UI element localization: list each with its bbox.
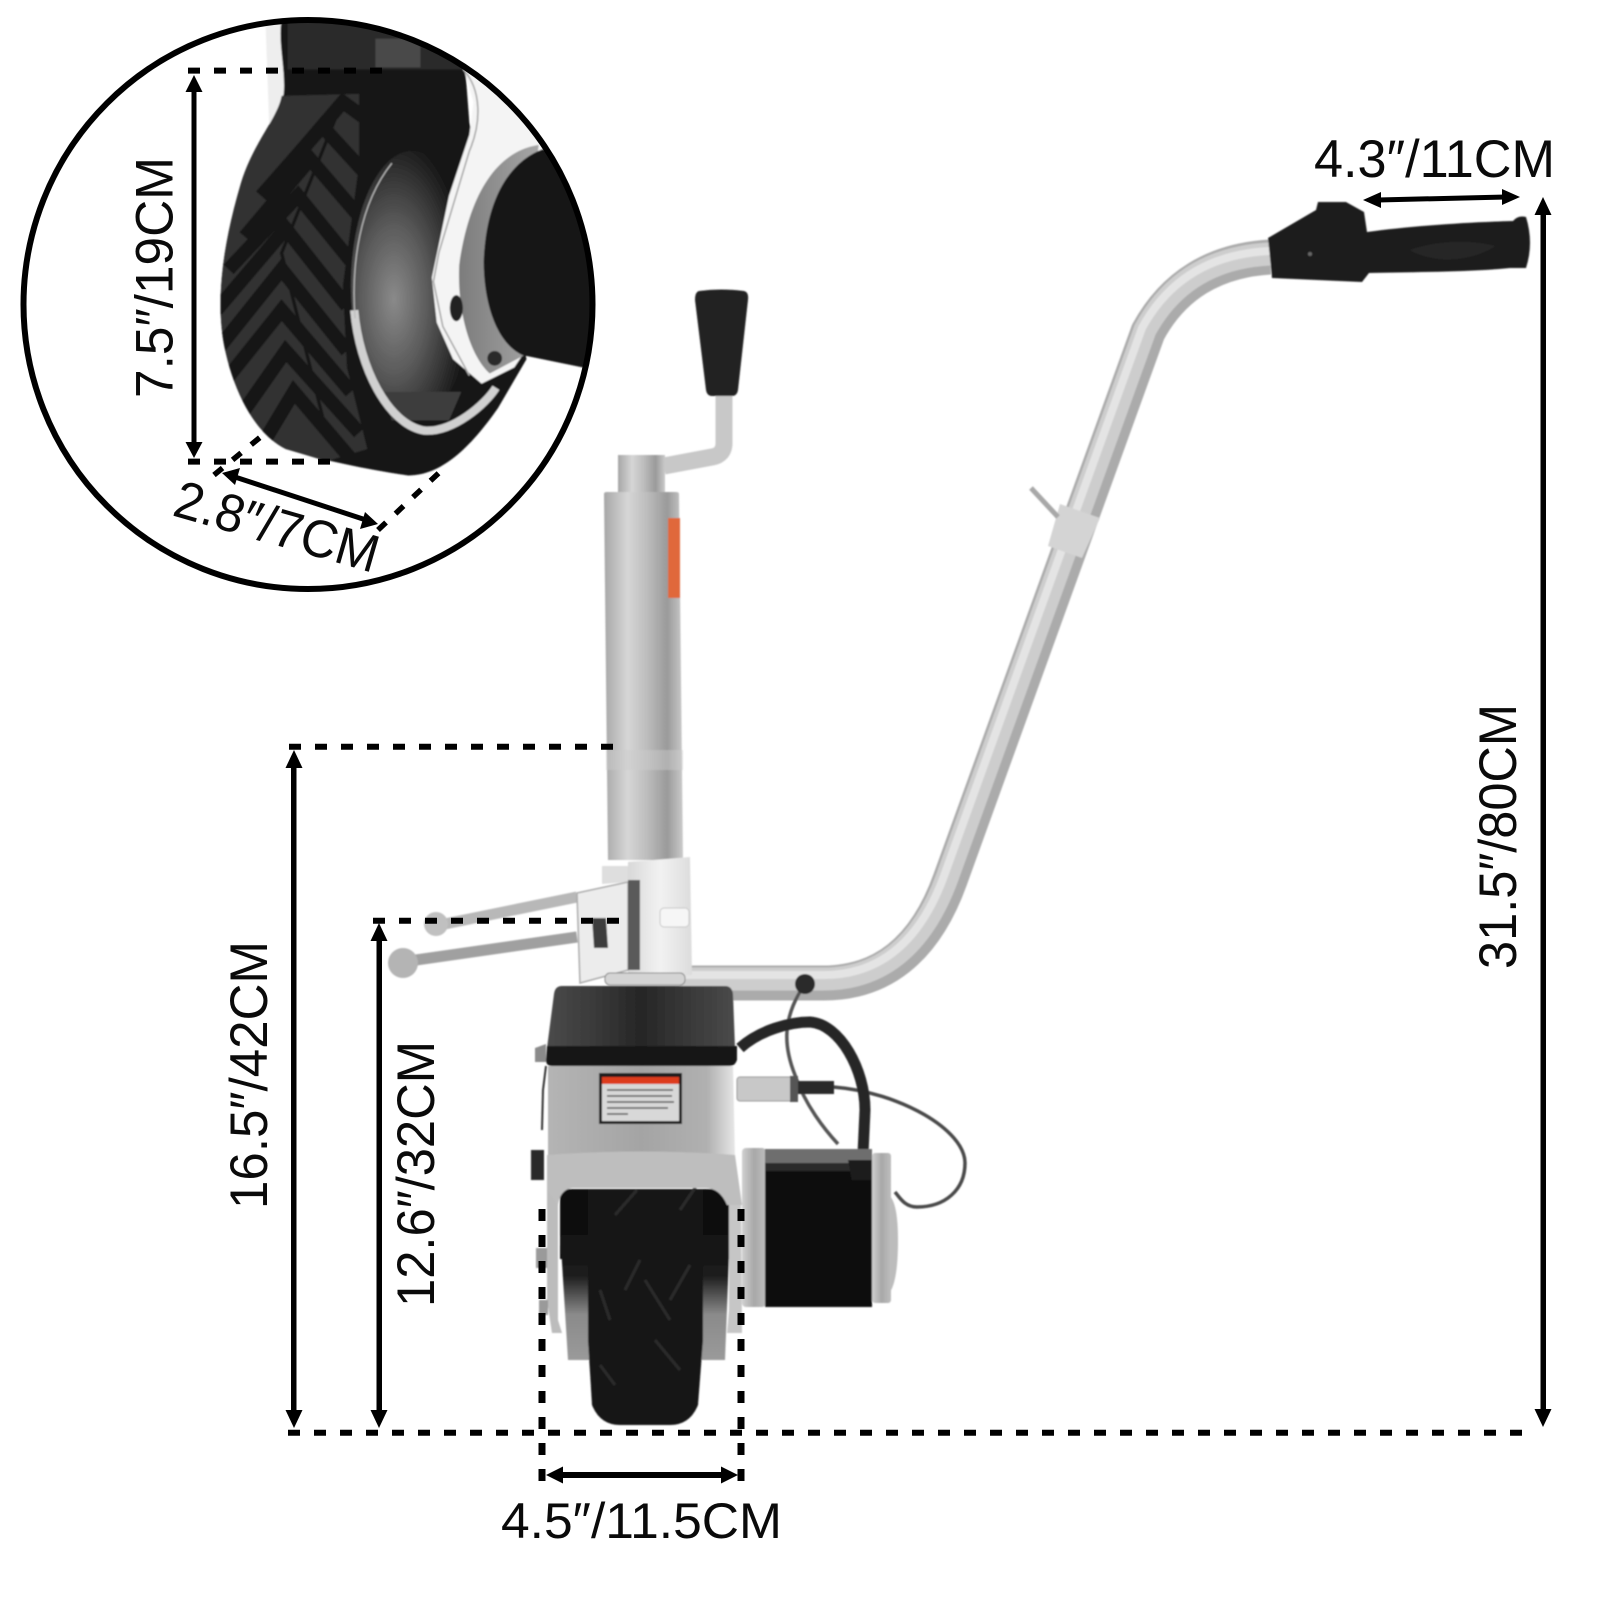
inset circle outline [24,20,592,589]
wheel and hub [560,1185,730,1425]
label: tyre height: 7.5″/19CM [126,157,184,398]
cable connector [737,1076,834,1102]
arrow: clamp height [370,923,388,1428]
label: grip width: 4.3″/11CM [1314,130,1555,189]
steering handle tube [680,251,1270,983]
arrow: total height [1534,197,1552,1427]
motor tube [483,148,590,368]
height guide lines [188,71,386,462]
arrow: tyre height [186,75,202,458]
crank handle [664,290,748,466]
label: wheel width: 4.5″/11.5CM [501,1493,782,1549]
arrow: wheel width [546,1466,738,1484]
label: lift height: 16.5″/42CM [220,941,279,1209]
arrow: lift height [286,750,302,1428]
tyre body [221,16,527,476]
motor cables [740,974,965,1207]
warning sticker [599,1073,682,1124]
tyre tread chevrons [220,94,368,460]
jack product illustration [388,202,1530,1425]
arrow: tyre width [222,468,378,529]
collar ring [459,145,539,373]
handle grip with switch [1268,202,1530,282]
fork plate [430,70,544,385]
gearbox housing [531,986,742,1333]
wheel inset circle [24,16,612,589]
width guide lines [214,435,443,530]
jack post [604,455,683,860]
clamp collar [577,857,692,985]
label: clamp height: 12.6″/32CM [387,1041,446,1307]
arrow: grip width [1363,189,1520,208]
label: total height: 31.5″/80CM [1469,704,1528,969]
tyre close-up photo [212,16,612,482]
dimension guide lines [288,747,1522,1481]
clamp bolts [388,897,577,978]
motor [742,1148,898,1307]
wheel hub [350,152,457,392]
label: tyre width: 2.8″/7CM [168,470,386,584]
handle sleeve and pin [1031,488,1100,558]
